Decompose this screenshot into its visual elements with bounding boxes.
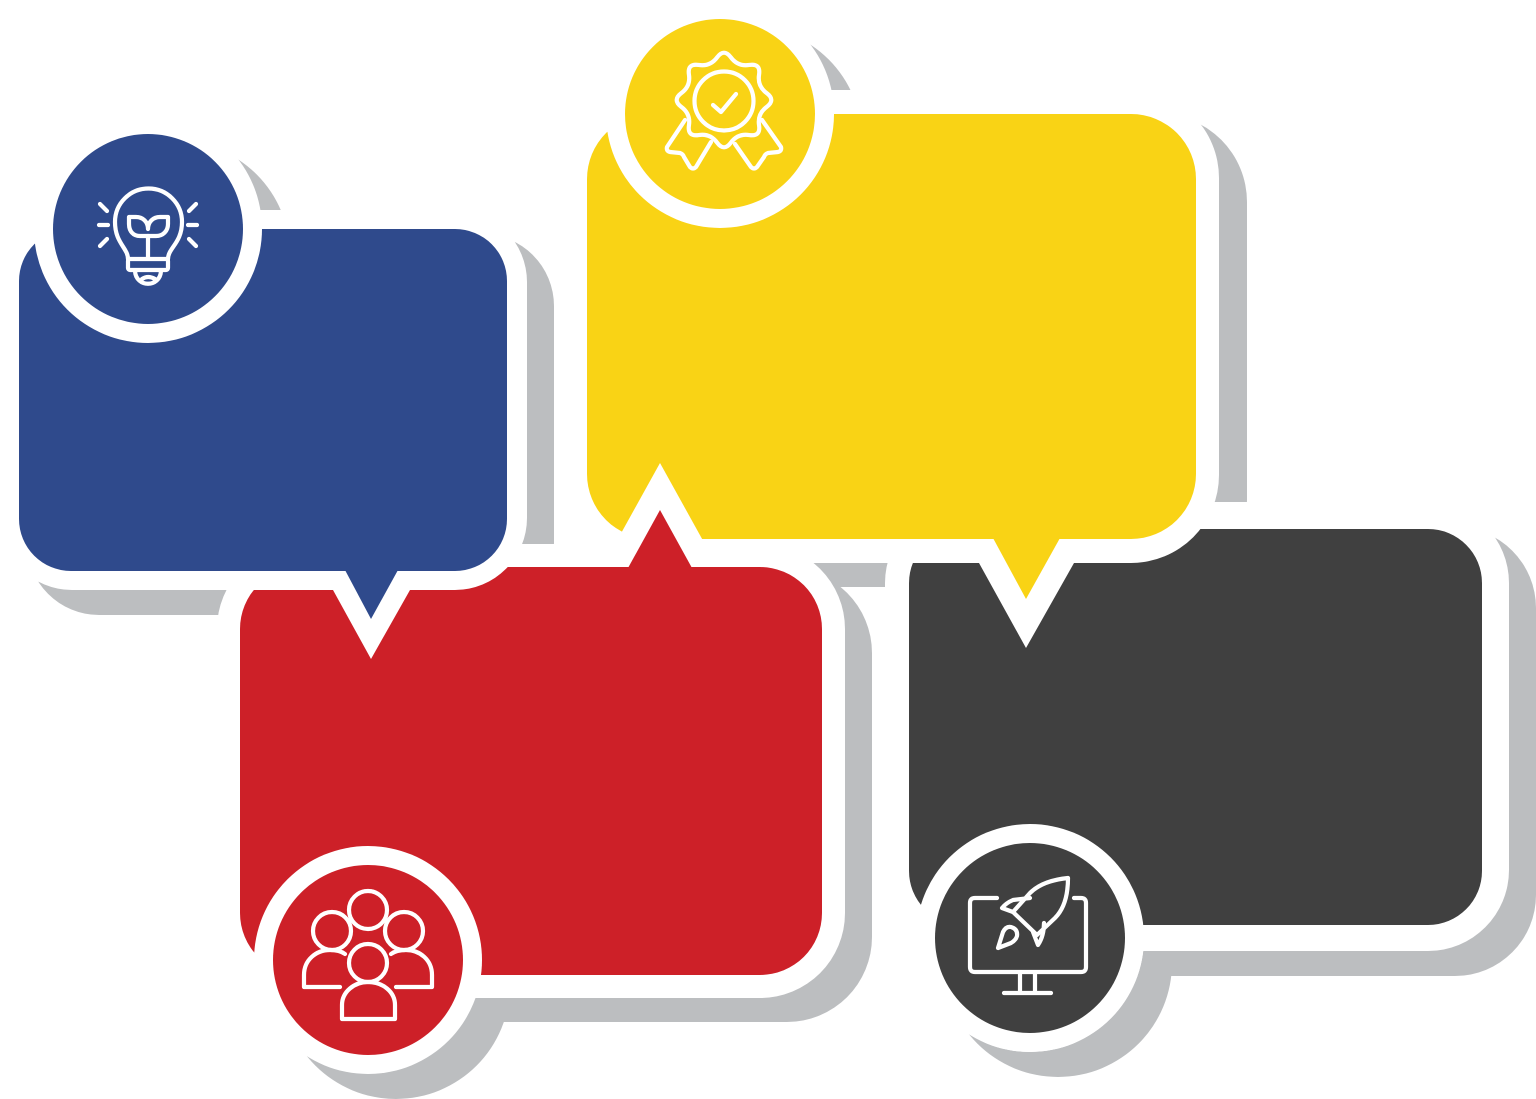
- panel: dark grey speech bubble: [885, 502, 1509, 1052]
- panel: yellow speech bubble: [563, 0, 1219, 648]
- icon: rocket launching from a computer monitor: [970, 878, 1086, 993]
- icon: group of four people: [304, 891, 432, 1019]
- panel: blue speech bubble: [0, 115, 527, 659]
- panel: red speech bubble: [217, 463, 845, 1074]
- icon: light bulb with sprout: [99, 189, 197, 284]
- icon: award rosette with check mark: [667, 53, 781, 168]
